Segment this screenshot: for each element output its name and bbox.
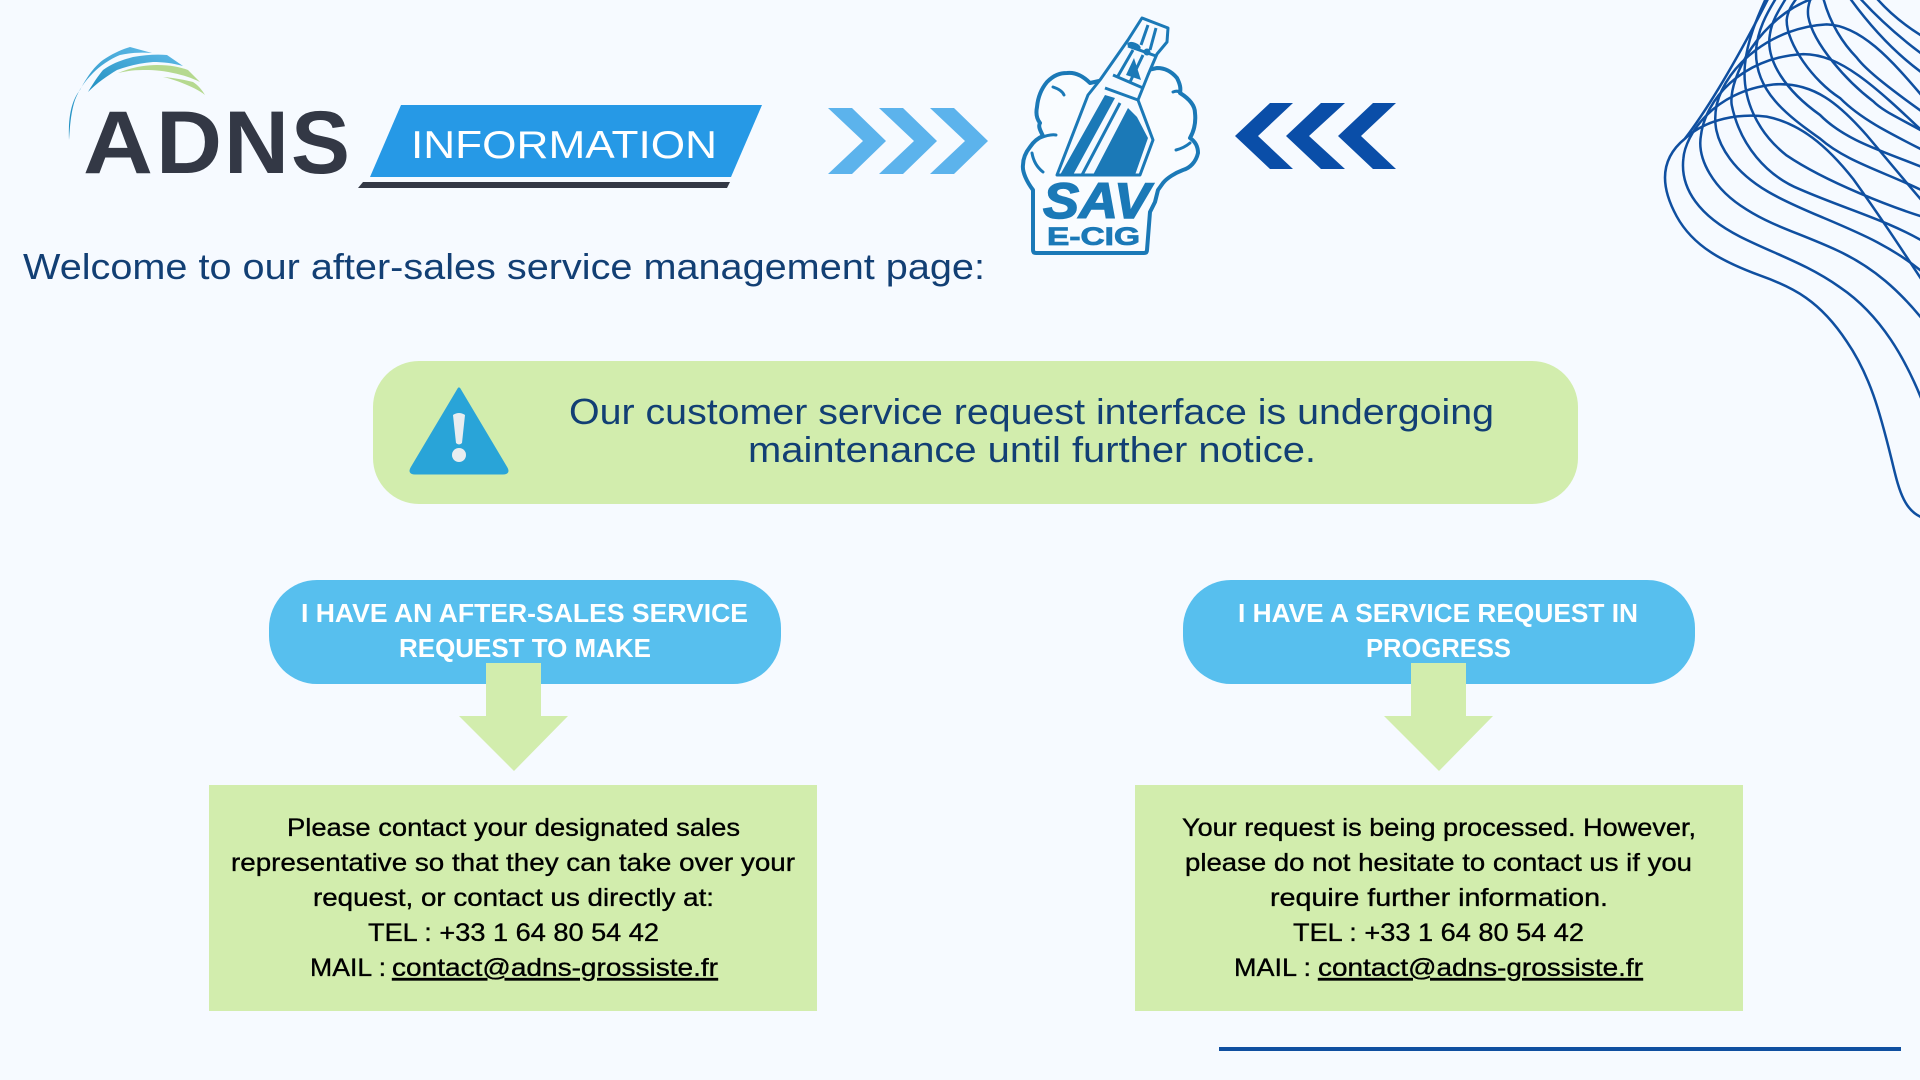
ADNS logo [69, 47, 350, 192]
welcome text: Welcome to our after-sales service management page: [23, 246, 985, 287]
button: new after-sales request [269, 580, 781, 684]
notice text: Our customer service request interface is undergoing [569, 391, 1494, 432]
panel: contact instructions: representative so that they can take over your [231, 849, 795, 877]
panel: request in progress details: require further information. [1270, 884, 1608, 912]
chevrons pointing right [828, 108, 988, 174]
panel: request in progress details: contact@adns-grossiste.fr [1318, 954, 1643, 982]
information banner: INFORMATION [411, 124, 717, 167]
logo wordmark [83, 92, 350, 192]
panel: contact instructions: MAIL : [310, 954, 386, 982]
vapour cloud and label plate [1023, 68, 1198, 253]
information banner [358, 105, 762, 188]
panel: request in progress details: Your request is being processed. However, [1182, 814, 1696, 842]
E-CIG text: E-CIG [1047, 223, 1140, 251]
notice text: maintenance until further notice. [748, 429, 1316, 470]
panel: request in progress details: MAIL : [1234, 954, 1311, 982]
button: request in progress [1183, 580, 1695, 684]
logo wordmark: N [224, 92, 289, 192]
cloud detail strokes [1032, 87, 1190, 172]
panel: maintenance notice [373, 361, 1578, 504]
button: new after-sales request: I HAVE AN AFTER-SALES SERVICE [301, 600, 748, 628]
panel: contact instructions: request, or contact us directly at: [313, 884, 714, 912]
SAV E-CIG logo [1023, 18, 1198, 253]
button: new after-sales request: REQUEST TO MAKE [399, 635, 651, 663]
logo wordmark: S [291, 92, 350, 192]
logo swoosh arcs [69, 47, 205, 140]
panel: contact instructions [209, 785, 817, 1011]
notice text [569, 391, 1494, 470]
panel: request in progress details: TEL : +33 1 64 80 54 42 [1293, 919, 1584, 947]
button: request in progress: I HAVE A SERVICE REQUEST IN [1238, 600, 1638, 628]
vape device [1057, 18, 1168, 175]
decorative wave line art [1665, 0, 1920, 519]
panel: contact instructions: contact@adns-grossiste.fr [392, 954, 718, 982]
panel: request in progress details [1135, 785, 1743, 1011]
logo wordmark: A [83, 92, 153, 192]
arrow: left column [459, 663, 568, 771]
logo wordmark: D [156, 92, 222, 192]
chevrons pointing left [1235, 103, 1396, 169]
arrow: right column [1384, 663, 1493, 771]
panel: contact instructions: Please contact your designated sales [287, 814, 740, 842]
panel: contact instructions: TEL : +33 1 64 80 54 42 [368, 919, 659, 947]
icon: warning triangle [411, 389, 507, 473]
panel: request in progress details: please do not hesitate to contact us if you [1185, 849, 1692, 877]
SAV text: SAV [1043, 173, 1154, 229]
button: request in progress: PROGRESS [1366, 635, 1511, 663]
